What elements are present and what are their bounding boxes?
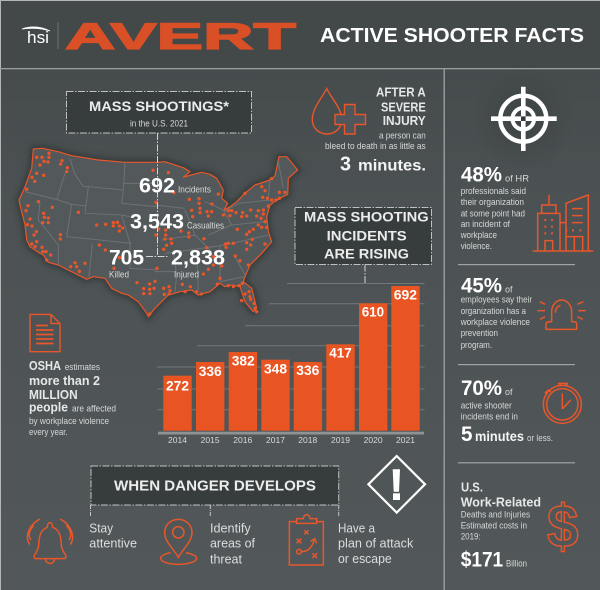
stat: injured: Injured	[174, 269, 199, 280]
header logo: hsi AVERT	[22, 16, 297, 57]
bar 2018: 336	[296, 362, 320, 378]
text: have a plan: Have a	[338, 521, 376, 536]
bar 2016: 382	[232, 352, 255, 368]
fact: 45% of employees: program.	[461, 340, 492, 351]
bar 2018	[294, 362, 322, 445]
hsi mark: hsi	[27, 28, 49, 47]
text block: OSHA: by workplace violence	[29, 416, 109, 427]
fact: 45% of employees: prevention	[461, 328, 498, 339]
heading box: when danger develops	[91, 466, 339, 505]
fact: 45% of employees: 45%	[461, 274, 502, 297]
fact: 48% of HR professionals: professionals said	[461, 186, 526, 197]
bar 2016	[229, 352, 257, 445]
fact: 48% of HR professionals: 48%	[461, 164, 502, 187]
bar 2017: 348	[264, 360, 287, 376]
text: stay attentive	[89, 521, 137, 551]
bar 2014	[163, 376, 192, 445]
fact: work-related costs: Billion	[506, 559, 527, 570]
icon: warning diamond	[368, 456, 425, 513]
stat: incidents: Incidents	[178, 185, 211, 196]
chart heading: INCIDENTS	[327, 229, 407, 244]
bar 2014: 272	[166, 378, 189, 394]
stat: killed: Killed	[109, 269, 129, 280]
fact: 48% of HR professionals: of HR	[505, 174, 529, 185]
text: identify areas of threat	[210, 521, 255, 566]
chart heading: MASS SHOOTING	[304, 210, 429, 225]
fact: work-related costs: U.S.	[461, 480, 483, 495]
fact: 70% of active shooter incidents: of	[505, 387, 513, 398]
icon: document	[30, 314, 60, 352]
heading box: mass shootings	[66, 92, 252, 133]
fact: 45% of employees: employees say their	[461, 295, 532, 306]
title: ACTIVE SHOOTER FACTS	[320, 25, 584, 47]
text block: after a severe injury: minutes.	[358, 158, 426, 175]
fact: 70% of active shooter incidents: or less.	[527, 433, 553, 444]
text block: OSHA: are affected	[72, 404, 116, 415]
stat: casualties	[130, 211, 224, 234]
fact: 45% of employees: workplace violence	[460, 317, 530, 328]
text block: OSHA: estimates	[65, 362, 100, 373]
bar 2020	[359, 303, 387, 445]
fact: 70% of active shooter incidents	[461, 377, 553, 446]
stat: killed	[109, 246, 144, 280]
text: have a plan	[338, 521, 414, 566]
US map with incident dots	[19, 148, 298, 317]
stat: injured: 2,838	[171, 246, 225, 269]
icon: map pin	[161, 519, 197, 564]
fact: work-related costs: Estimated costs in	[461, 520, 527, 531]
fact: 70% of active shooter incidents: incidents end in	[461, 411, 518, 422]
text block: OSHA: people	[29, 401, 68, 415]
fact: work-related costs	[461, 480, 541, 572]
stat: casualties: Casualties	[187, 221, 224, 232]
icon: office buildings	[533, 195, 593, 251]
bar 2019: 417	[329, 345, 352, 361]
fact: 48% of HR professionals: at some point had	[461, 208, 525, 219]
fact: 48% of HR professionals	[460, 164, 529, 252]
AVERT wordmark: AVERT	[65, 16, 297, 57]
icon: clipboard plan	[289, 515, 323, 565]
stat: incidents: 692	[139, 175, 175, 198]
text block: after a severe injury: INJURY	[383, 113, 426, 128]
text block: after a severe injury: a person can	[379, 130, 426, 141]
bar 2015: 2015	[201, 435, 220, 445]
stat: casualties: 3,543	[130, 211, 184, 234]
bar 2015	[196, 362, 224, 445]
heading box: mass shootings: in the U.S. 2021	[130, 119, 188, 130]
fact: 48% of HR professionals: an incident of	[461, 219, 510, 230]
text: stay attentive: Stay	[89, 521, 113, 536]
fact: 45% of employees: organization has a	[461, 306, 527, 317]
text: identify areas of threat: Identify	[210, 521, 251, 536]
fact: 70% of active shooter incidents: active shooter	[461, 400, 512, 411]
icon: bell	[27, 519, 73, 563]
stat: killed: 705	[109, 246, 144, 269]
fact: 48% of HR professionals: workplace	[460, 230, 497, 241]
text: identify areas of threat: threat	[210, 551, 242, 566]
icon: blood drop and cross	[312, 88, 366, 134]
fact: 45% of employees	[460, 274, 532, 351]
icon: crosshair target	[491, 87, 557, 151]
text: identify areas of threat: areas of	[210, 536, 255, 551]
bar 2018: 2018	[298, 435, 318, 445]
bar 2021	[391, 286, 420, 445]
icon: stopwatch	[543, 383, 581, 423]
heading box: mass shootings: MASS SHOOTINGS*	[89, 99, 230, 114]
fact: 48% of HR professionals: violence.	[461, 241, 492, 252]
fact: 70% of active shooter incidents: 5	[461, 423, 473, 446]
text: have a plan: plan of attack	[338, 536, 414, 551]
text block: OSHA: OSHA	[29, 359, 61, 373]
stat: injured	[171, 246, 225, 280]
bar 2020: 610	[362, 304, 384, 320]
text block: after a severe injury: SEVERE	[381, 99, 426, 114]
bar 2019: 2019	[331, 435, 350, 445]
bar 2019	[326, 344, 355, 445]
stat: incidents	[139, 175, 211, 198]
bar 2021: 692	[394, 286, 417, 302]
text: stay attentive: attentive	[89, 536, 137, 551]
fact: 45% of employees: of	[505, 284, 513, 295]
fact: 48% of HR professionals: their organization	[461, 197, 524, 208]
map statistics	[109, 175, 225, 280]
fact: work-related costs: $171	[461, 549, 503, 572]
text block: OSHA: more than 2	[29, 374, 100, 388]
fact: 70% of active shooter incidents: 70%	[461, 377, 502, 400]
chart heading: ARE RISING	[324, 246, 409, 261]
bar 2014: 2014	[168, 435, 187, 445]
bar 2015: 336	[199, 363, 222, 379]
text block: after a severe injury	[325, 85, 426, 176]
text block: OSHA: every year.	[29, 427, 68, 438]
text block: after a severe injury: bleed to death in as little as	[325, 141, 426, 152]
bar 2017	[261, 360, 290, 445]
fact: work-related costs: Deaths and Injuries	[461, 509, 530, 520]
bar 2017: 2017	[266, 435, 285, 445]
icon: alarm light	[537, 300, 586, 329]
icon: dollar sign: $	[547, 493, 578, 560]
fact: work-related costs: 2019:	[461, 531, 481, 542]
bar 2016: 2016	[233, 435, 253, 445]
chart heading	[295, 208, 432, 264]
fact: 70% of active shooter incidents: minutes	[475, 428, 524, 444]
bar 2021: 2021	[396, 435, 415, 445]
text block: OSHA	[29, 359, 116, 438]
heading box: when danger develops: WHEN DANGER DEVELOPS	[114, 479, 316, 495]
bar chart: mass shooting incidents	[157, 208, 432, 445]
bar 2020: 2020	[364, 435, 383, 445]
text block: OSHA: MILLION	[29, 388, 78, 402]
text block: after a severe injury: 3	[340, 154, 351, 176]
text block: after a severe injury: AFTER A	[376, 85, 426, 100]
fact: work-related costs: Work-Related	[461, 495, 541, 510]
text: have a plan: or escape	[338, 551, 392, 566]
